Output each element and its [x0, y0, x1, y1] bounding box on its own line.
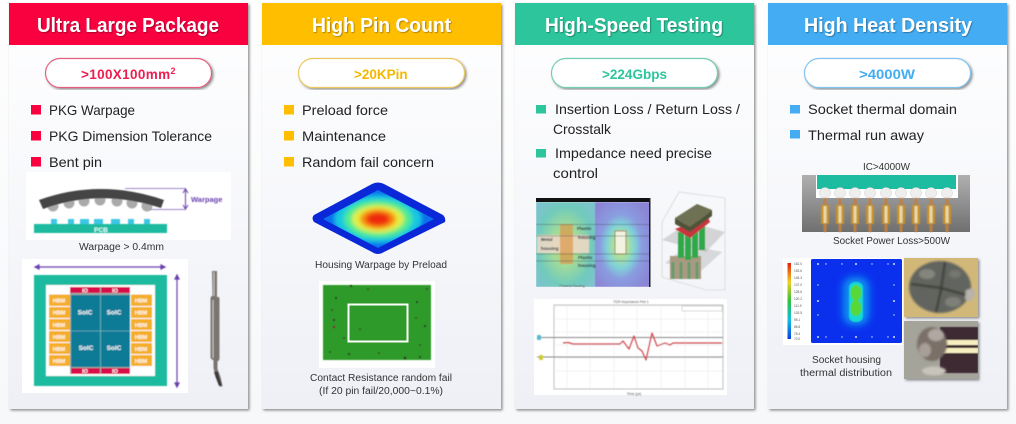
chart: thermal distribution map: 120.2 — [794, 297, 802, 301]
chart: thermal distribution map: 137.0 — [794, 283, 802, 287]
icon: bent pin — [210, 271, 222, 387]
bullet list — [790, 101, 957, 143]
diagram: socket cross-section — [802, 175, 970, 232]
panel: Ultra Large Package — [9, 3, 248, 409]
metric pill: data rate: >224Gbps — [602, 67, 667, 82]
diagram: package layout: HBM — [53, 335, 66, 341]
bullet list: Socket thermal domain — [808, 101, 957, 117]
chart: thermal distribution map: 78.4 — [794, 332, 800, 336]
header: High-Speed Testing — [515, 3, 754, 45]
metric pill: power — [804, 58, 970, 88]
diagram: package layout: HBM — [135, 298, 148, 304]
chart: field simulation: housing — [578, 263, 596, 268]
chart: field simulation: Plastic — [577, 226, 592, 231]
metric pill: pin count: >20KPin — [354, 67, 408, 82]
header: High Heat Density — [768, 3, 1007, 45]
bullet list: Random fail concern — [302, 154, 434, 170]
caption: warpage value: Warpage > 0.4mm — [79, 242, 164, 253]
chart: impedance line chart — [534, 299, 727, 396]
photo: burnt pad top view — [904, 258, 978, 317]
chart: thermal distribution map: 162.0 — [794, 262, 802, 266]
bullet list: PKG Dimension Tolerance — [49, 128, 212, 144]
bullet list — [31, 102, 212, 170]
metric pill: package size: >100X100mm — [81, 67, 170, 82]
chart: impedance line chart: Time (ps) — [627, 392, 641, 396]
bullet list: Bent pin — [49, 154, 102, 170]
chart: impedance line chart: TDR Impedance Plot 1 — [613, 300, 649, 304]
diagram: warpage: Warpage — [191, 195, 222, 204]
chart: thermal distribution map: 95.1 — [794, 318, 800, 322]
diagram: package layout: SoIC — [79, 345, 94, 352]
chart: thermal distribution map — [783, 258, 903, 345]
diagram: package layout — [22, 259, 188, 393]
header: Ultra Large Package — [9, 3, 248, 45]
chart: housing warpage contour — [312, 182, 445, 254]
chart: thermal distribution map: 86.8 — [794, 325, 800, 329]
chart: thermal distribution map: 103.5 — [794, 311, 802, 315]
bullet list: PKG Warpage — [49, 102, 135, 118]
diagram: package layout: HBM — [53, 359, 66, 365]
diagram: package layout: SoIC — [107, 310, 122, 316]
bullet list — [284, 102, 434, 170]
bullet list: Preload force — [302, 102, 388, 118]
bullet list: Impedance need precise — [555, 145, 712, 161]
header: Ultra Large Package: Ultra Large Package — [37, 15, 219, 37]
diagram: package layout: HBM — [135, 310, 148, 316]
chart: field simulation: Metal — [541, 237, 553, 242]
chart: thermal distribution map: 145.3 — [794, 276, 802, 280]
diagram: package layout: HBM — [53, 347, 66, 353]
chart: thermal distribution map: 111.9 — [794, 304, 802, 308]
diagram: warpage — [26, 172, 231, 240]
chart: field simulation: Present Routing — [559, 284, 585, 288]
bullet list: control — [553, 165, 598, 181]
chart: field simulation: Plastic — [578, 255, 593, 260]
diagram: package layout: IO — [82, 288, 89, 294]
diagram: package layout: IO — [112, 288, 119, 294]
chart: thermal distribution map: 128.6 — [794, 290, 802, 294]
diagram: package layout: HBM — [135, 347, 148, 353]
metric pill: package size — [46, 58, 212, 88]
caption: thermal distribution: Socket housing — [812, 355, 881, 366]
chart: field simulation: housing — [541, 246, 559, 251]
diagram: package layout: HBM — [53, 310, 66, 316]
bullet list: Insertion Loss / Return Loss / — [555, 101, 740, 117]
caption: housing warpage: Housing Warpage by Preload — [315, 260, 447, 271]
caption: contact resistance: (If 20 pin fail/20,000~0.1%) — [319, 386, 443, 397]
diagram: warpage: PCB — [94, 227, 108, 234]
metric pill: power: >4000W — [859, 67, 915, 82]
diagram: package layout: HBM — [53, 323, 66, 329]
header: High Pin Count: High Pin Count — [312, 15, 451, 37]
header: High Pin Count — [262, 3, 501, 45]
chart: contact resistance map — [319, 281, 435, 368]
diagram: package layout: HBM — [135, 359, 148, 365]
bullet list: Maintenance — [302, 128, 386, 144]
diagram: package layout: HBM — [135, 323, 148, 329]
diagram: package layout: SoIC — [78, 310, 93, 316]
panel: High Heat Density — [768, 3, 1007, 409]
diagram: package layout: HBM — [135, 335, 148, 341]
diagram: 3D connector model — [662, 192, 725, 290]
diagram: package layout: HBM — [53, 298, 66, 304]
chart: field simulation: housing — [578, 235, 596, 240]
diagram: package layout: SoIC — [107, 345, 122, 352]
photo: burnt pin side view — [904, 321, 978, 379]
caption: IC power: IC>4000W — [863, 162, 911, 173]
bullet list: Crosstalk — [553, 121, 612, 137]
header: High-Speed Testing: High-Speed Testing — [545, 15, 723, 37]
caption: thermal distribution — [800, 355, 892, 379]
bullet list: Thermal run away — [808, 127, 924, 143]
metric pill: package size: 2 — [170, 66, 176, 76]
diagram: package layout: IO — [112, 369, 119, 375]
caption: socket power loss: Socket Power Loss>500W — [833, 236, 951, 247]
panel: High Pin Count — [262, 3, 501, 409]
chart: thermal distribution map: 70.0 — [794, 337, 800, 341]
chart: field simulation — [536, 198, 650, 288]
header: High Heat Density: High Heat Density — [804, 15, 973, 37]
bullet list — [536, 101, 740, 181]
caption: thermal distribution: thermal distribution — [800, 368, 892, 379]
panel: High-Speed Testing — [515, 3, 754, 409]
diagram: package layout: IO — [82, 369, 89, 375]
caption: contact resistance — [310, 373, 452, 397]
caption: contact resistance: Contact Resistance random fail — [310, 373, 452, 384]
metric pill: pin count — [298, 58, 464, 88]
metric pill: data rate — [552, 58, 718, 88]
chart: thermal distribution map: 153.6 — [794, 269, 802, 273]
